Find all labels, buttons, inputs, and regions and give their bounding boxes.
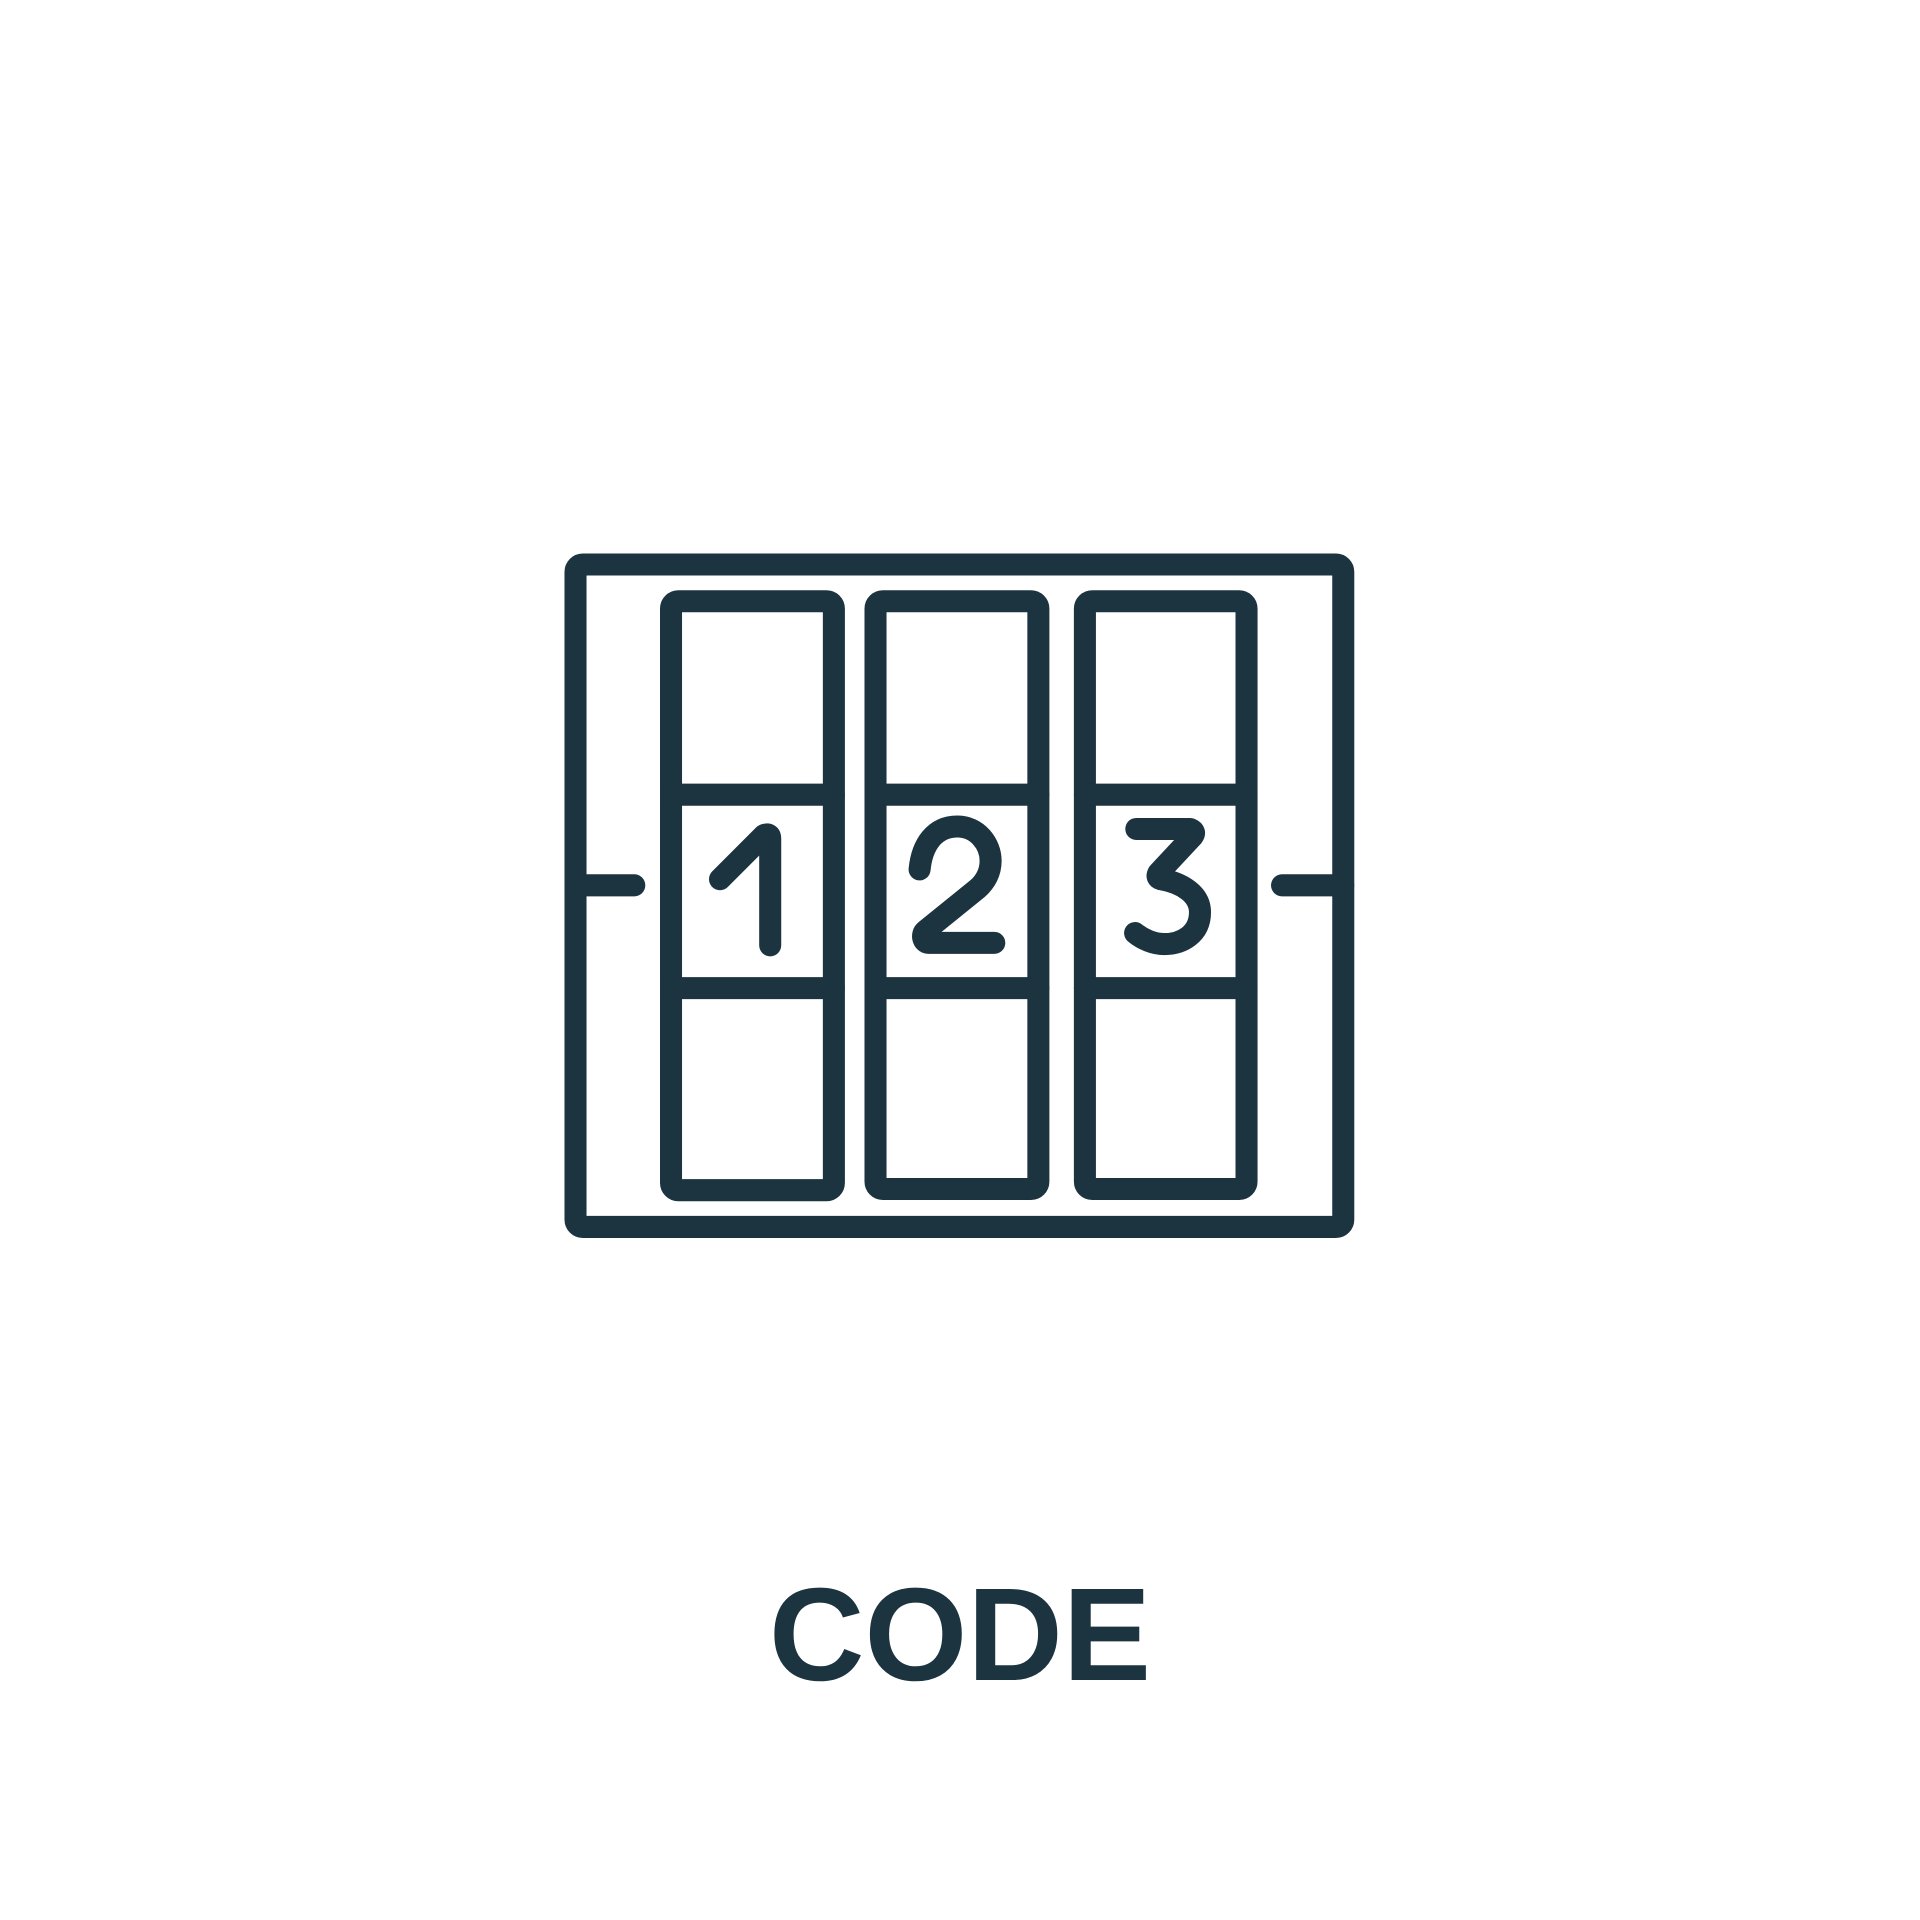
- digit 2: [920, 827, 994, 943]
- label: CODE: CODE: [769, 1561, 1151, 1709]
- left tick: [576, 876, 634, 894]
- right tick: [1282, 876, 1343, 894]
- icon: code panel: [576, 564, 1343, 1227]
- outer frame: [576, 564, 1343, 1227]
- column 2: [876, 601, 1038, 1189]
- column 1: [671, 601, 834, 1190]
- digit 3: [1135, 829, 1200, 944]
- digit 1: [720, 834, 770, 945]
- column 3: [1085, 601, 1247, 1189]
